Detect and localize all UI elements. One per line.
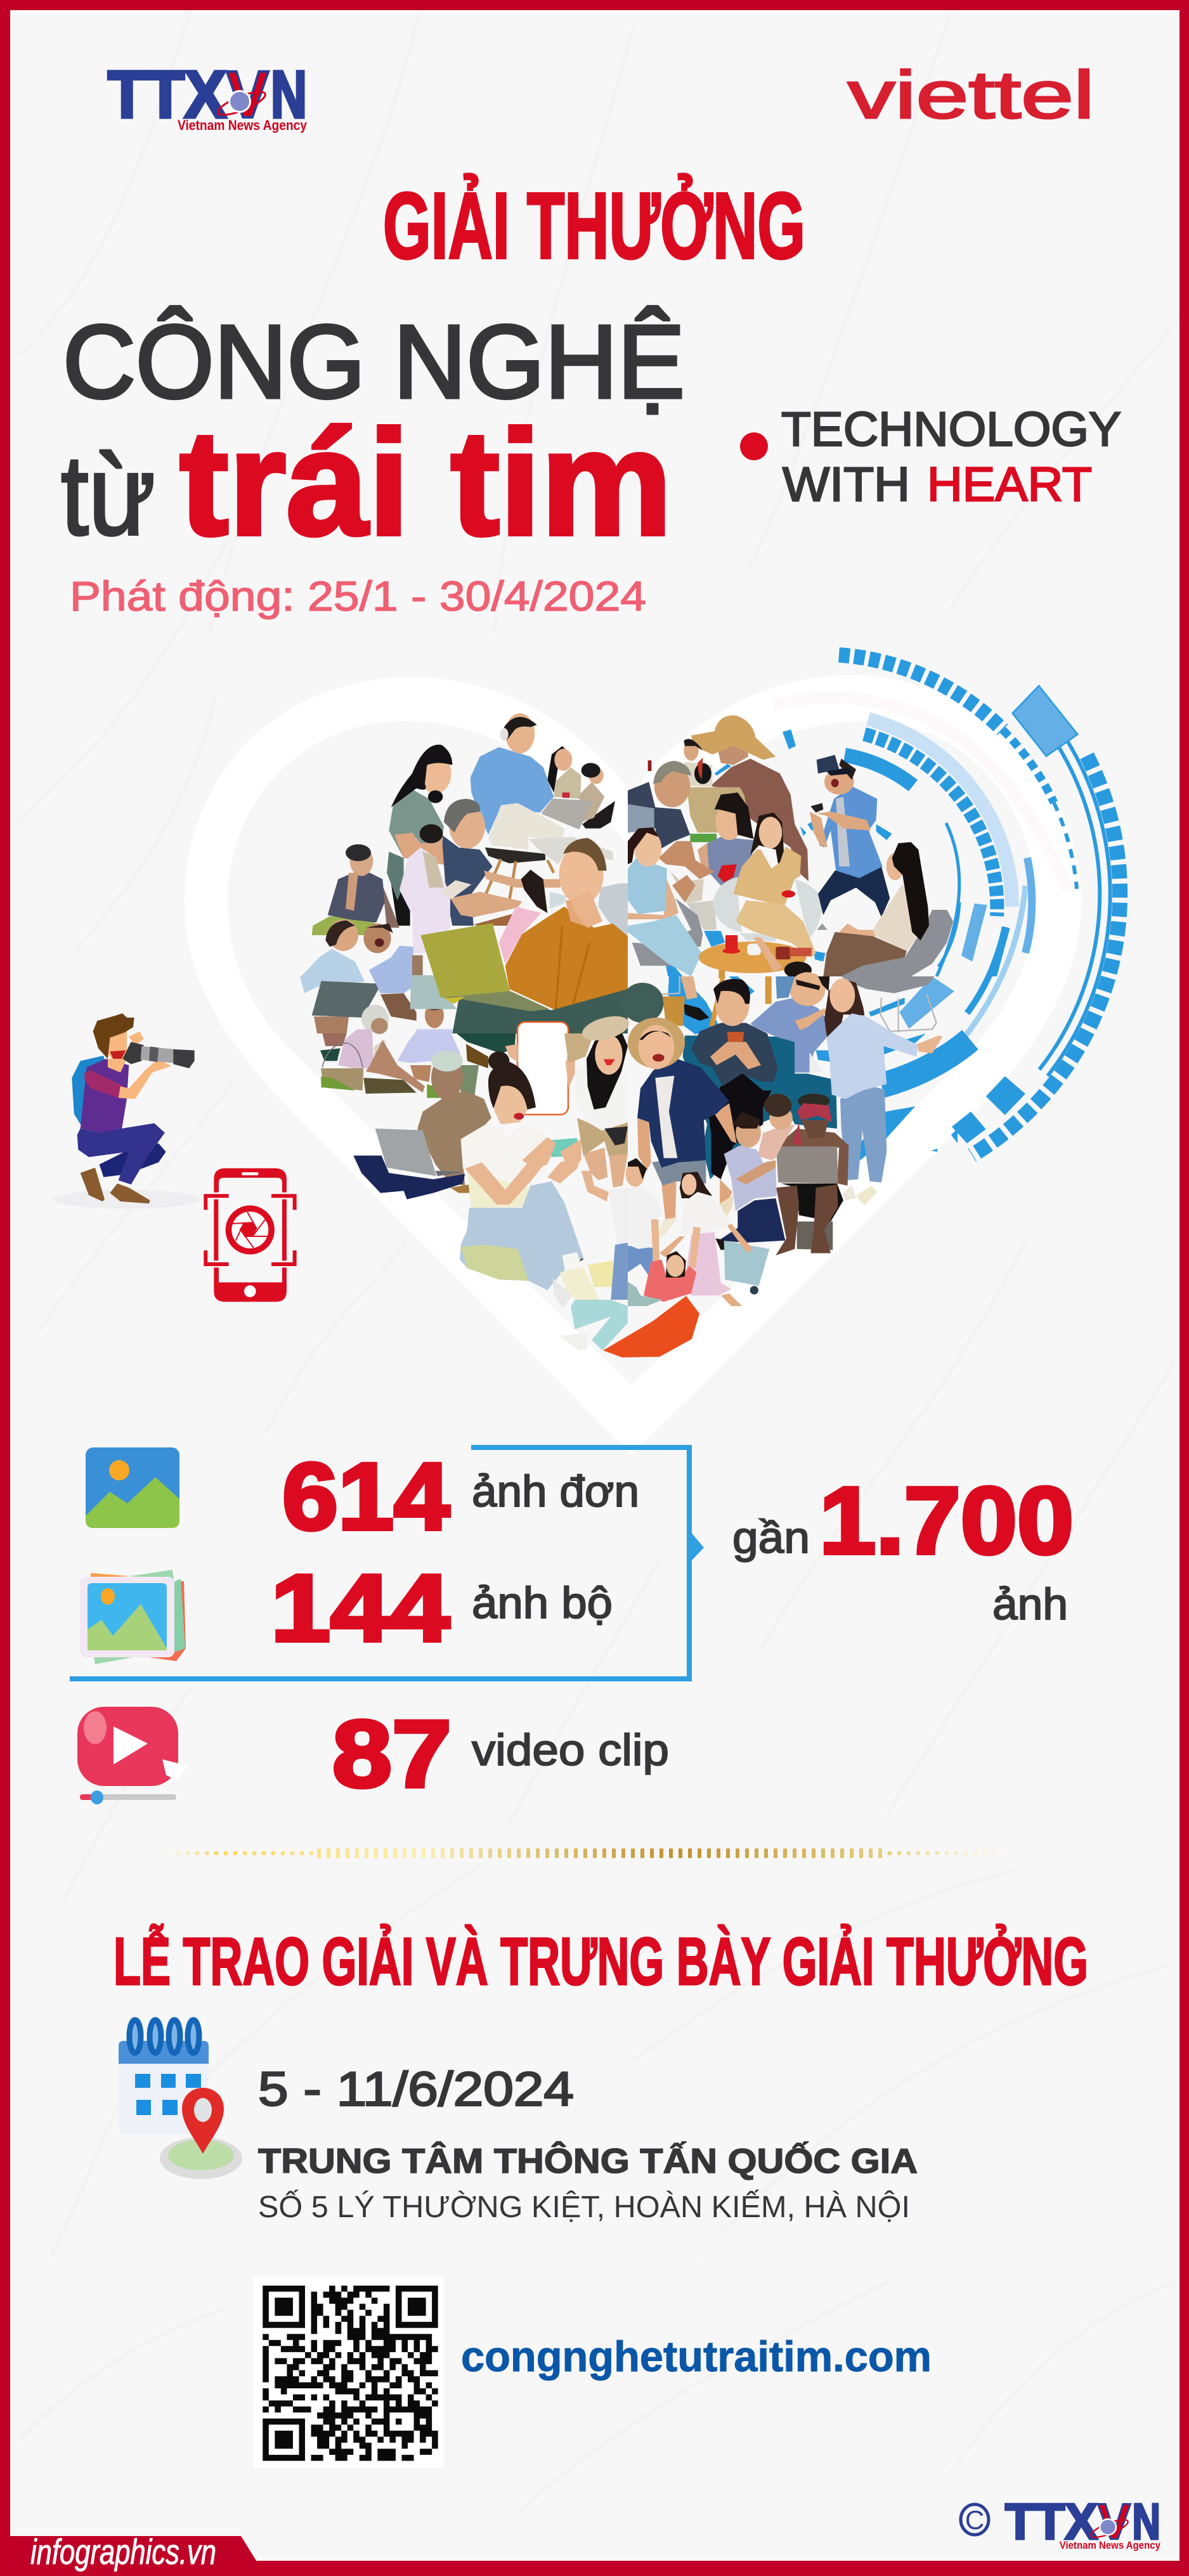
person: man with glasses carrying child [750,972,829,1073]
venue name: TRUNG TÂM THÔNG TẤN QUỐC GIA [258,2141,918,2180]
person: man looking at phone [691,979,778,1179]
divider: gold dashes [167,1851,1017,1855]
logo: TTXVN footer: Vietnam News Agency [1060,2539,1160,2551]
person: man in straw hat [628,1018,737,1238]
phone man leg and shoe [720,1179,734,1217]
tech arc fragments [666,730,1025,1160]
person: grandmother with basket [320,1029,425,1094]
icon: photo set [80,1570,186,1664]
person: beanbag woman's legs [559,1300,628,1350]
logo: TTXVN: V [226,58,269,132]
person: woman with red phone [658,793,753,930]
person: laughing boy [363,924,417,1021]
icon: phone with aperture [205,1168,295,1302]
icon: tech diamond [1013,686,1077,756]
person: man with headphones [471,713,613,900]
people: upper right group [628,715,953,978]
icon: calendar [119,2020,209,2134]
people: lower right group [621,972,943,1306]
person: boy with laptop [300,919,382,1033]
copyright mark [961,2504,989,2535]
people: upper left group [300,713,628,1034]
copyright mark: C [965,2505,984,2535]
logo: TTXVN: N [271,58,307,132]
logo: TTXVN: Vietnam News Agency [178,117,308,133]
footer tab [0,2536,257,2563]
person: toddler [758,1094,795,1160]
stat: 144: 144 [271,1555,450,1661]
person: knee and brown leg [457,1033,518,1068]
shadow [53,1190,201,1209]
person: old man in plaid [442,799,562,926]
person: grandmother on phone [312,845,400,935]
person: old man with tablet [628,761,750,850]
person: woman with straw hat [691,715,809,881]
person: young man and child behind [648,739,712,786]
total: ảnh: ảnh [992,1579,1068,1629]
red dot [740,432,768,460]
table with cups [699,935,812,978]
table [474,913,516,926]
title: trái tim: trái tim [179,399,672,567]
person: woman on beanbag [628,1219,701,1306]
stats frame [70,1447,704,1679]
person: woman in pink skirt [659,1172,753,1306]
technology arcs [774,655,1120,1155]
photographer [72,1013,195,1203]
person: boy in beige shirt [579,763,615,829]
person: old lady with laptop [353,1051,491,1200]
person: man in orange hoodie [452,838,628,1033]
label: video clip: video clip [472,1725,669,1775]
person: girl in pink [499,870,566,964]
person: man with VR headset [810,755,890,917]
title: công nghệ: CÔNG NGHỆ [63,304,685,420]
person: woman with drink [547,746,582,799]
icon: video [77,1707,188,1804]
laptop: olive [420,923,550,1011]
chair: grey armchair left [632,898,703,966]
legs and cup [621,976,772,1026]
person: woman with open arms [824,978,943,1206]
chair: grey chair base [661,976,937,1032]
phone mockup [517,1022,568,1115]
stat: 614: 614 [282,1443,450,1550]
person: woman in blue vest [628,827,702,976]
stat: 87: 87 [332,1700,452,1807]
total: 1.700: 1.700 [819,1467,1074,1574]
person: bare-chested man with laptop [776,1094,848,1255]
person: woman in yellow dress [734,813,828,957]
title: từ: từ [61,432,155,559]
logo: TTXVN footer: TTX [1005,2494,1098,2550]
person: man with raised phone arm [582,1171,628,1300]
logo: TTXVN [108,58,308,133]
icon: location pin [160,2088,242,2179]
person: woman with hat and camera [564,1032,628,1188]
logo: viettel: viettel [848,58,1095,133]
chair: grey armchair right [841,910,953,976]
subtitle: heart: HEART [927,458,1092,512]
label: ảnh bộ: ảnh bộ [472,1578,613,1628]
qr code [254,2277,445,2468]
logo: TTXVN footer [1005,2494,1160,2551]
logo: TTXVN footer: N [1132,2494,1160,2550]
person: woman in beige blouse [823,842,929,976]
person: schoolgirl [715,1111,785,1251]
venue address: SỐ 5 LÝ THƯỜNG KIỆT, HOÀN KIẾM, HÀ NỘI [258,2189,910,2224]
sofa: teal [683,1035,837,1179]
person: boy in lilac [398,1032,461,1082]
total: gần: gần [732,1513,810,1562]
illustration: photographer and phone icon [53,1013,295,1302]
subtitle: with: WITH [783,458,910,512]
people: lower left group [320,1029,628,1350]
title: giải thưởng: GIẢI THƯỞNG [383,173,805,278]
person: child doctor [400,824,471,953]
white heart ring [185,675,1081,1455]
logo: TTXVN: TTX [108,58,226,132]
hat on woman [580,1012,632,1045]
person: man in white shirt [626,1158,663,1281]
suitcase [724,1241,769,1295]
subtitle: technology: TECHNOLOGY [781,403,1121,456]
chair: pale armchair [713,877,823,942]
footer site name: infographics.vn [30,2532,216,2572]
photo collage: people in heart [300,713,953,1357]
person: old lady and boy [361,1000,452,1034]
icon: single photo [86,1447,179,1528]
person: woman in green dress [387,745,461,926]
event date: 5 - 11/6/2024 [258,2062,574,2116]
person: young woman with phone [460,1051,613,1308]
website url: congnghetutraitim.com [461,2333,932,2381]
launch dates: Phát động: 25/1 - 30/4/2024 [70,573,646,619]
label: ảnh đơn: ảnh đơn [472,1466,639,1516]
chair: behind hoodie [598,883,628,936]
beanbag [603,1296,699,1357]
logo: TTXVN footer: V [1098,2494,1131,2550]
props: leg and tablet [410,955,457,1009]
